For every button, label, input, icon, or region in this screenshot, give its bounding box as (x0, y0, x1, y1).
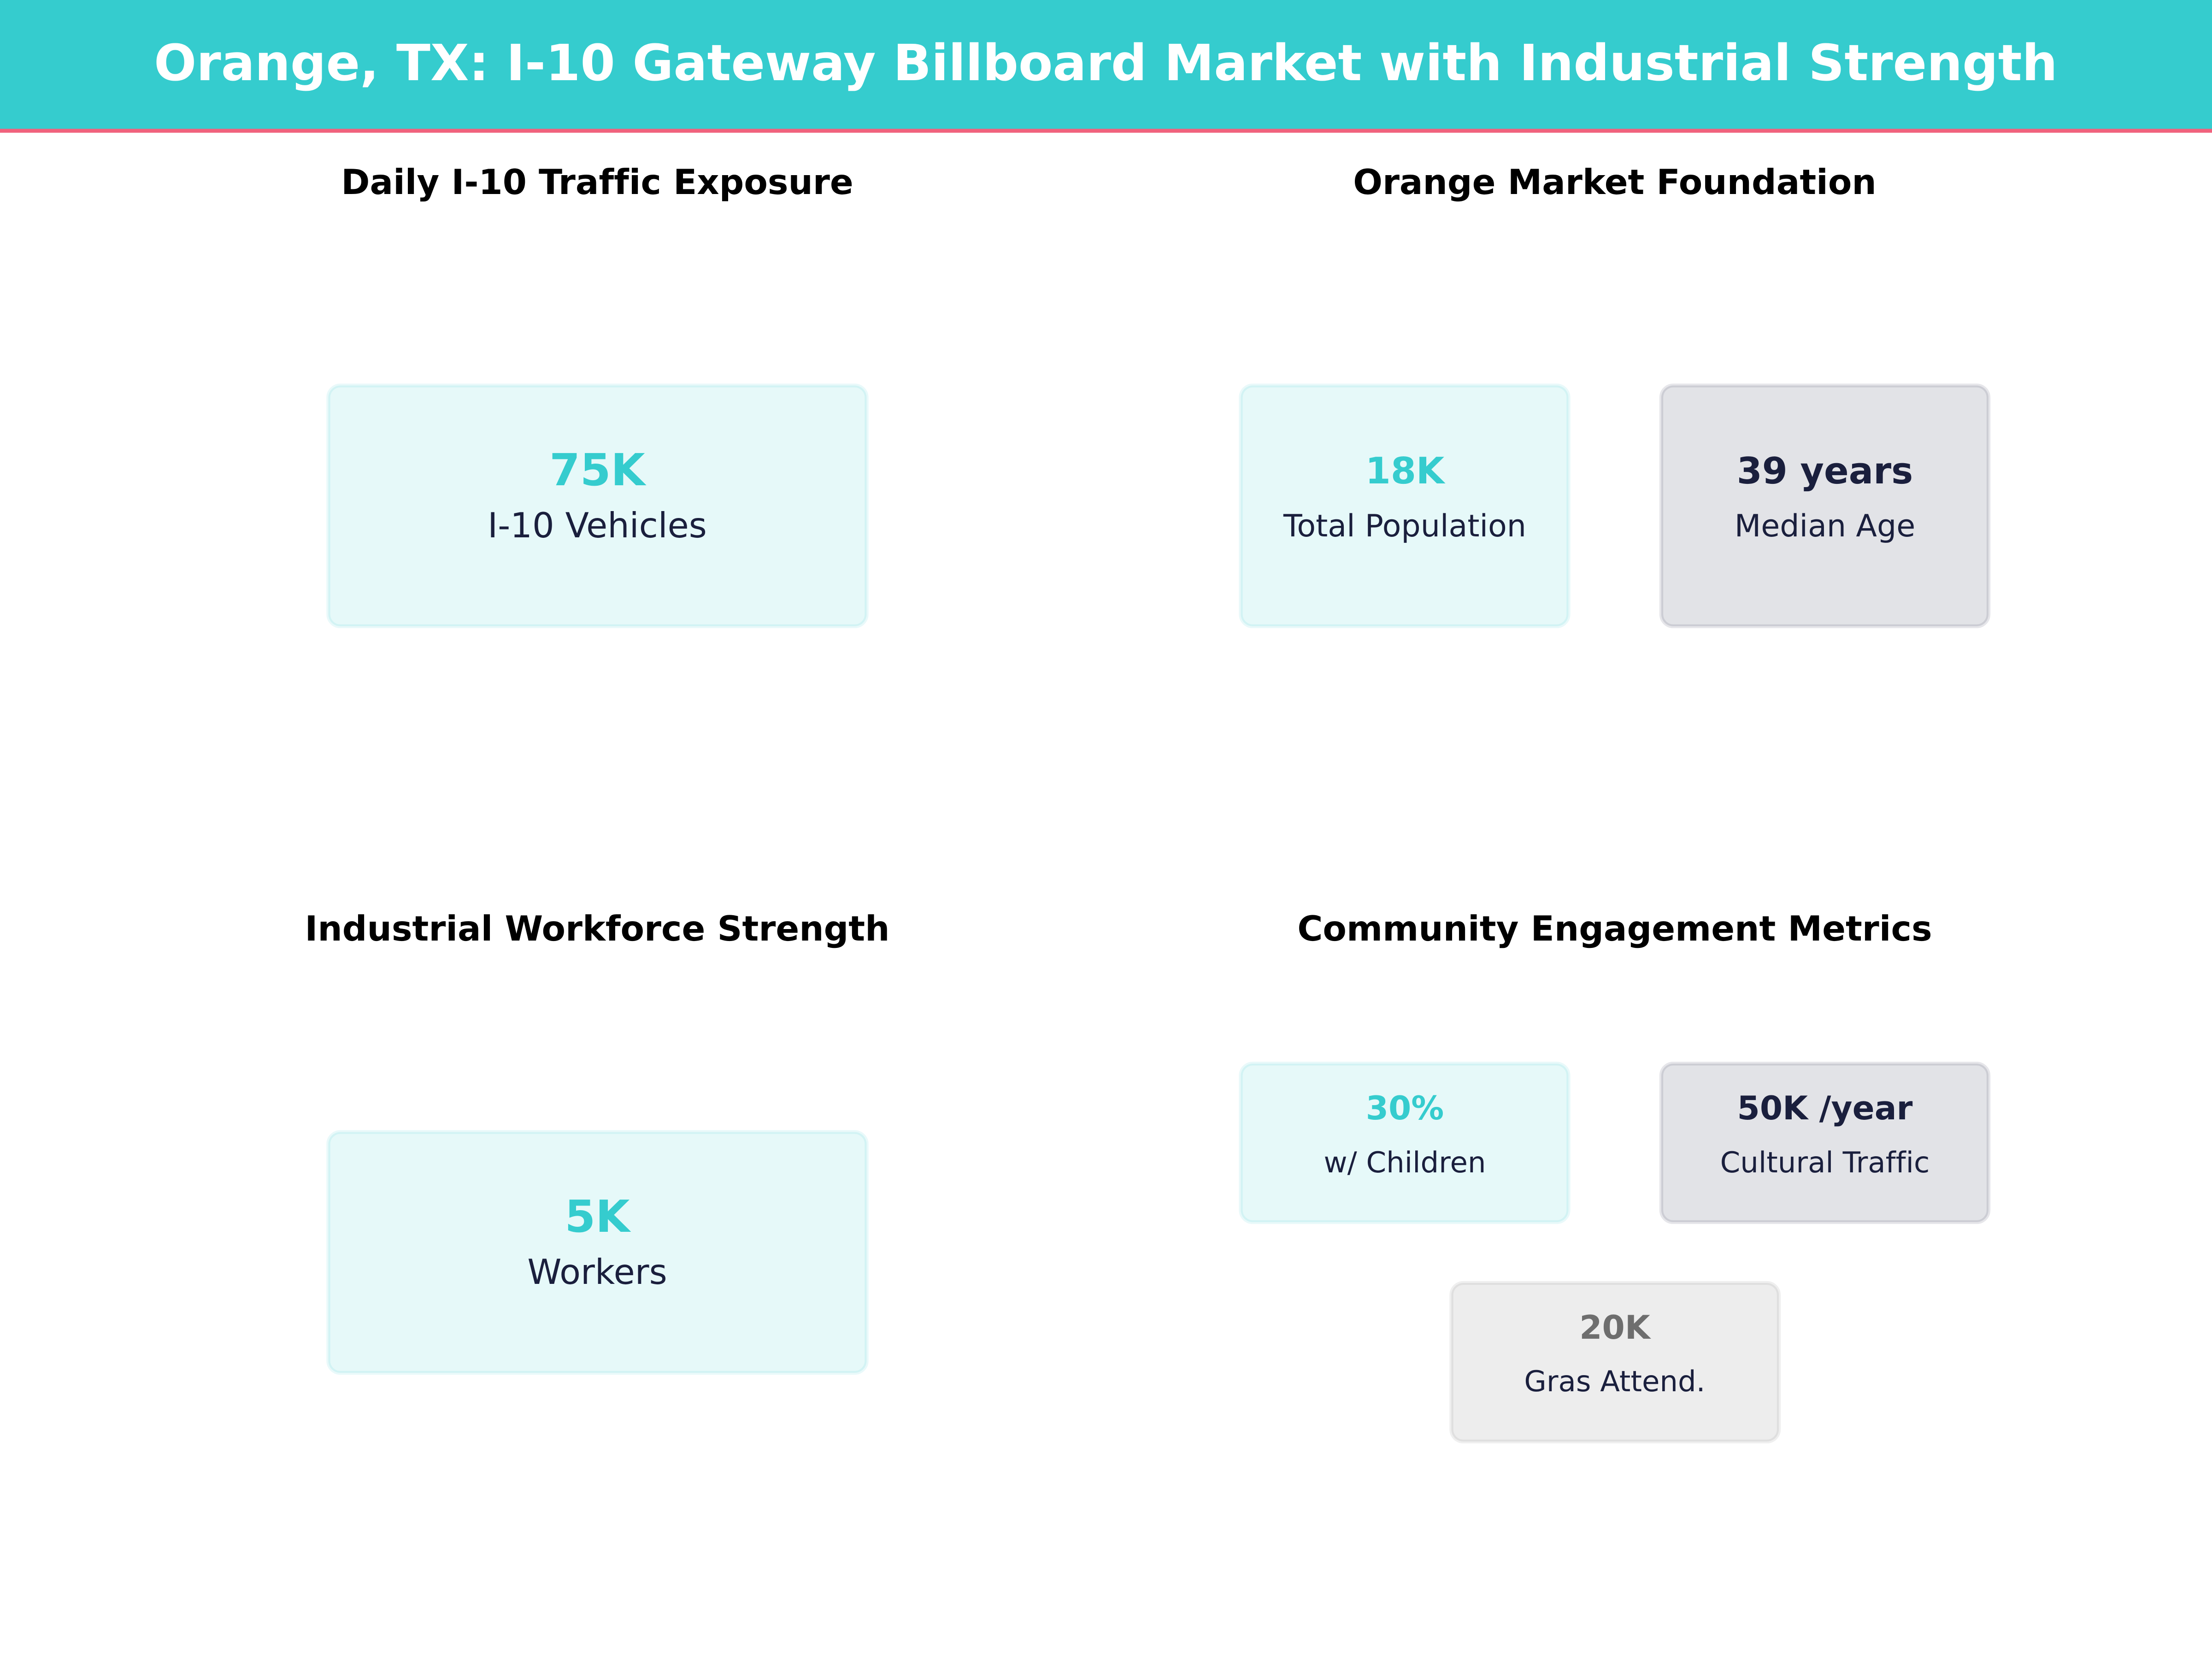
card: total population: Total Population (1283, 508, 1526, 544)
card: workers (328, 1132, 866, 1373)
card: median age: 39 years (1737, 450, 1913, 492)
card: gras attendance: 20K (1579, 1308, 1652, 1347)
card: total population: 18K (1365, 450, 1446, 492)
card: cultural traffic (1661, 1064, 1988, 1222)
card: cultural traffic: Cultural Traffic (1720, 1146, 1930, 1179)
card: workers: Workers (527, 1252, 667, 1292)
card: median age: Median Age (1735, 508, 1915, 544)
heading: market foundation: Orange Market Foundation (1353, 162, 1877, 202)
panel: industrial workforce strength (305, 908, 890, 1373)
panel: daily I-10 traffic exposure (328, 162, 866, 626)
card: I-10 vehicles (328, 385, 866, 626)
card: I-10 vehicles: I-10 Vehicles (488, 505, 707, 546)
card: cultural traffic: 50K /year (1737, 1089, 1913, 1127)
title: Orange, TX: I-10 Gateway Billboard Market with Industrial Strength (154, 34, 2058, 92)
card: gras attendance (1452, 1283, 1779, 1441)
heading: community engagement: Community Engagement Metrics (1297, 908, 1932, 949)
card: with children: 30% (1366, 1089, 1444, 1127)
header banner (0, 0, 2212, 133)
card: I-10 vehicles: 75K (549, 444, 647, 496)
card: gras attendance: Gras Attend. (1524, 1365, 1706, 1398)
card: with children: w/ Children (1324, 1146, 1486, 1179)
card: with children (1241, 1064, 1569, 1222)
heading: traffic exposure: Daily I-10 Traffic Exposure (341, 162, 853, 202)
panel: Orange market foundation (1241, 162, 1988, 626)
card: median age (1661, 385, 1988, 626)
panel: community engagement metrics (1241, 908, 1988, 1441)
heading: workforce strength: Industrial Workforce Strength (305, 908, 890, 949)
card: total population (1241, 385, 1569, 626)
card: workers: 5K (565, 1191, 631, 1242)
